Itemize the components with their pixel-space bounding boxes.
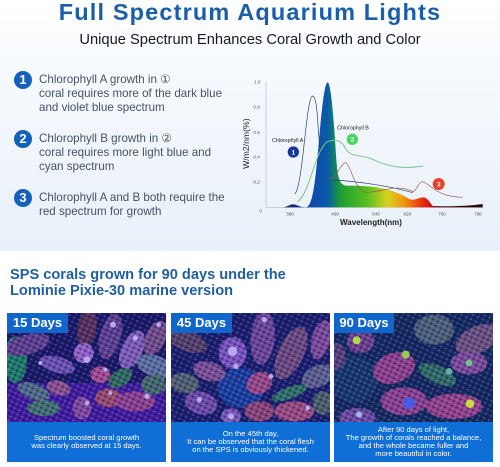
y axis labels: 0.2	[253, 180, 260, 185]
caption 1: was clearly observed at 15 days.	[31, 441, 142, 450]
x axis labels: 780	[474, 211, 482, 216]
point 1: and violet blue spectrum	[39, 101, 165, 114]
red curve	[329, 163, 463, 197]
marker 2	[347, 134, 358, 145]
tag: 15 days	[7, 313, 68, 333]
marker 1	[288, 146, 299, 158]
spectrum fill	[283, 82, 483, 207]
panel: 90 days	[334, 313, 493, 462]
label B: Chlorophyll B	[337, 125, 369, 131]
point 1: coral requires more of the dark blue	[39, 87, 222, 100]
coral photo 1	[7, 313, 166, 422]
caption 3: more beautiful in color.	[375, 449, 452, 458]
tag: 45 days: 45 Days	[177, 315, 226, 330]
panel: 15 days	[7, 313, 166, 462]
list: chlorophyll points: 3	[19, 190, 27, 205]
caption 3: and the whole became fuller and	[359, 441, 468, 450]
x axis labels: 380	[286, 211, 294, 216]
list: chlorophyll points: coral requires more light blue and	[39, 146, 211, 159]
y axis labels: 0.4	[253, 155, 260, 160]
y axis labels: 0.6	[253, 130, 260, 135]
background: top section gradient	[0, 0, 500, 251]
caption 1: Spectrum boosted coral growth	[34, 433, 139, 442]
spectrum chart	[241, 79, 484, 227]
x axis labels	[286, 211, 482, 216]
list: chlorophyll points: red spectrum for growth	[39, 205, 161, 218]
coral photo 2	[171, 313, 330, 422]
x axis title: Wavelength(nm)	[340, 218, 402, 227]
point 1	[14, 71, 222, 114]
y axis labels: 0.8	[253, 104, 260, 109]
caption 2	[187, 429, 314, 454]
subtitle: Unique Spectrum Enhances Coral Growth and Color	[79, 32, 421, 48]
chlorophyll B curve	[297, 140, 423, 202]
x axis labels: 620	[403, 211, 412, 216]
point 1: 1	[19, 72, 27, 87]
section heading	[10, 267, 286, 299]
x axis labels: 700	[438, 211, 446, 216]
caption 1	[31, 433, 142, 450]
list: chlorophyll points: cyan spectrum	[39, 160, 114, 173]
section heading: Lominie Pixie-30 marine version	[10, 283, 233, 299]
point 2	[14, 130, 211, 173]
label A: Chlorophyll A	[272, 138, 304, 144]
caption 2: on the SPS is obviously thickened.	[192, 445, 309, 454]
marker 2: 2	[350, 137, 354, 144]
caption 3: After 90 days of light,	[378, 425, 449, 434]
section heading: SPS corals grown for 90 days under the	[10, 267, 286, 283]
list: chlorophyll points: Chlorophyll A and B both require the	[39, 191, 225, 204]
x axis labels: 460	[331, 211, 339, 216]
marker 3: 3	[437, 181, 441, 188]
chlorophyll A curve	[295, 96, 413, 194]
marker 1: 1	[291, 149, 295, 156]
caption 3: The growth of corals reached a balance,	[346, 433, 481, 442]
y axis labels: 0	[259, 209, 262, 214]
point 1: Chlorophyll A growth in ①	[39, 73, 171, 86]
x axis labels: 540	[372, 211, 380, 216]
point 3	[14, 189, 225, 218]
y axis labels	[253, 79, 262, 214]
y axis labels: 1.0	[254, 79, 261, 84]
tag: 45 days	[171, 313, 232, 333]
tag: 90 days: 90 Days	[339, 315, 389, 330]
coral photo 3	[334, 313, 493, 422]
panel: 45 days	[171, 313, 330, 462]
y axis title: W/m2/nm(%)	[241, 118, 251, 169]
tag: 90 days	[334, 313, 394, 333]
caption 2: It can be observed that the coral flesh	[187, 437, 314, 446]
tag: 15 days: 15 Days	[13, 315, 62, 330]
axes	[266, 82, 483, 207]
list: chlorophyll points: Chlorophyll B growth in ②	[39, 132, 172, 145]
caption 2: On the 45th day,	[223, 429, 278, 438]
marker 3	[433, 178, 445, 190]
caption 3	[346, 425, 481, 458]
list: chlorophyll points	[14, 71, 225, 218]
list: chlorophyll points: 2	[19, 131, 27, 146]
